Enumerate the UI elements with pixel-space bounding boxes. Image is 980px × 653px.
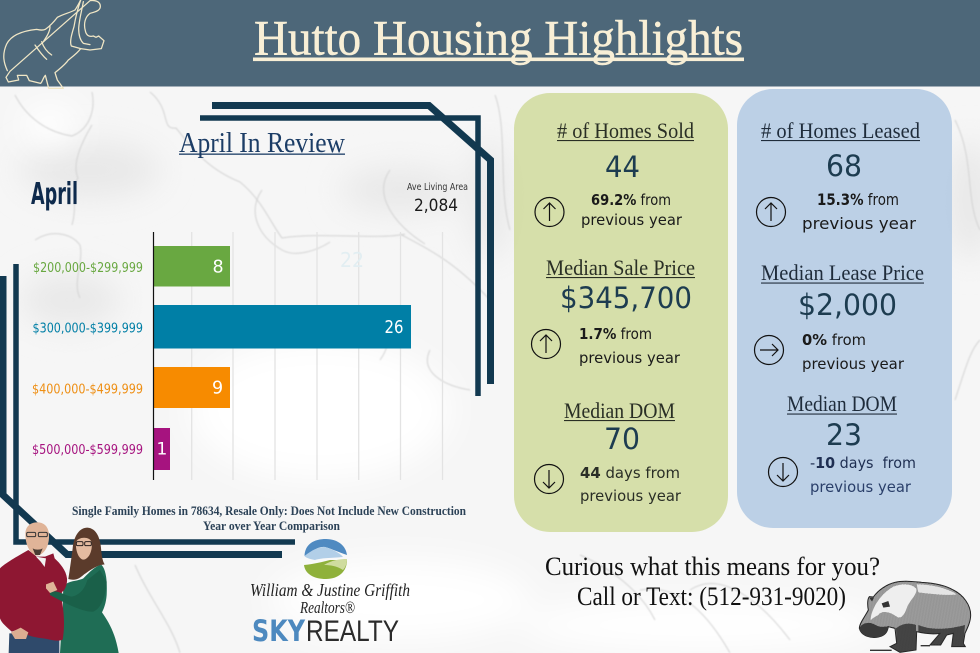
footnote: Year over Year Comparison [203, 519, 340, 533]
bar: 400k to 499k [32, 367, 230, 408]
bar: 300k to 399k: $300,000-$399,999 [32, 320, 143, 336]
footnote: Single Family Homes in 78634, Resale Only: Does Not Include New Construction [72, 504, 466, 518]
hippo body [859, 581, 971, 652]
lease price change [802, 331, 905, 373]
header band [0, 0, 980, 86]
icon: down arrow [534, 464, 564, 494]
bar chart: 22 [340, 248, 364, 272]
icon: up arrow [535, 198, 564, 226]
leased DOM change [810, 454, 916, 496]
homes sold change: previous year [581, 211, 683, 229]
bar: 300k to 399k [32, 305, 411, 348]
leased DOM change: previous year [810, 478, 912, 496]
sale price heading: Median Sale Price [546, 255, 695, 280]
man's beard [33, 548, 43, 555]
call to action: Curious what this means for you? [545, 552, 880, 581]
homes leased change: previous year [802, 214, 916, 233]
man's hand [11, 628, 28, 639]
sold DOM change [580, 464, 682, 505]
logo: Sky Realty: SKY [252, 614, 306, 648]
decorative bracket: top right [200, 106, 490, 396]
bar: 400k to 499k: $400,000-$499,999 [32, 382, 143, 398]
bar: 200k to 299k [33, 246, 230, 286]
man's glasses [27, 532, 47, 537]
woman's face [76, 538, 92, 560]
homes sold change: 69.2% from [591, 191, 671, 209]
sold DOM value: 70 [604, 422, 640, 456]
hippo eye and ear [869, 598, 890, 608]
bar: 200k to 299k: 8 [212, 258, 224, 278]
call to action [545, 552, 880, 611]
leased DOM heading: Median DOM [787, 391, 897, 416]
woman's glasses [76, 542, 91, 546]
lease price change: 0% from [802, 331, 866, 349]
decorative bracket: bottom left [3, 264, 295, 554]
chart heading: April In Review [179, 128, 346, 159]
homes leased heading: # of Homes Leased [761, 118, 920, 143]
sold DOM change: previous year [580, 487, 682, 505]
hippo light shoulder and face [871, 584, 916, 620]
logo: Sky Realty [250, 539, 410, 648]
sale price value: $345,700 [560, 281, 692, 315]
red sweater [0, 550, 67, 641]
hippo dark snout [859, 623, 888, 637]
man's collar [36, 557, 46, 567]
icon: engraved hippo [859, 581, 971, 652]
hippo light back [917, 584, 957, 595]
bar: 500k to 599k: 1 [156, 440, 167, 460]
sale price change: 1.7% from [579, 325, 652, 343]
woman's hand [46, 582, 57, 593]
sale price change: previous year [579, 349, 681, 367]
icon: up arrow [532, 330, 560, 358]
call to action: Call or Text: (512-931-9020) [577, 582, 846, 611]
icon: roaring hippo outline [4, 0, 104, 88]
logo mark [304, 539, 347, 579]
sale price change [579, 325, 681, 367]
icon: up arrow [756, 198, 786, 226]
hippo dark legs and belly [890, 624, 965, 652]
sold DOM change: 44 days from [580, 464, 680, 482]
stat: average living area: 2,084 [414, 196, 458, 216]
woman's hair [68, 528, 105, 580]
stat: average living area [407, 182, 468, 216]
lease price change: previous year [802, 355, 905, 373]
lease price heading: Median Lease Price [761, 260, 924, 285]
footnote [72, 504, 466, 533]
logo: Sky Realty: William & Justine Griffith [250, 580, 410, 600]
homes sold change [581, 191, 683, 229]
homes leased change [802, 190, 916, 233]
bar: 300k to 399k: 26 [384, 318, 404, 338]
bar: 400k to 499k: 9 [212, 378, 223, 398]
leased DOM change: -10 days from [810, 454, 916, 472]
man's head [25, 522, 49, 556]
logo: Sky Realty: Realtors® [299, 598, 355, 617]
title: Hutto Housing Highlights [254, 10, 743, 66]
homes leased change: 15.3% from [817, 190, 899, 209]
photo: couple [0, 522, 119, 653]
lease price value: $2,000 [798, 288, 897, 322]
chart month label: April [31, 177, 78, 212]
homes leased value: 68 [826, 149, 862, 183]
jeans [9, 633, 59, 653]
homes sold value: 44 [605, 150, 640, 184]
icon: right arrow [754, 336, 784, 364]
green sleeve [50, 570, 107, 612]
logo: Sky Realty: REALTY [306, 615, 399, 648]
bar: 500k to 599k: $500,000-$599,999 [32, 442, 143, 458]
homes sold heading: # of Homes Sold [557, 118, 694, 143]
icon: down arrow [768, 458, 798, 486]
panel: homes leased [737, 89, 952, 528]
hippo ground marks [870, 646, 930, 650]
bar chart [32, 232, 442, 480]
stat: average living area: Ave Living Area [407, 182, 468, 193]
green dress [60, 565, 119, 653]
bar: 200k to 299k: $200,000-$299,999 [33, 260, 143, 276]
panel: homes sold [514, 93, 728, 532]
sold DOM heading: Median DOM [564, 398, 675, 423]
leased DOM value: 23 [826, 418, 862, 452]
bar: 500k to 599k [32, 428, 170, 470]
